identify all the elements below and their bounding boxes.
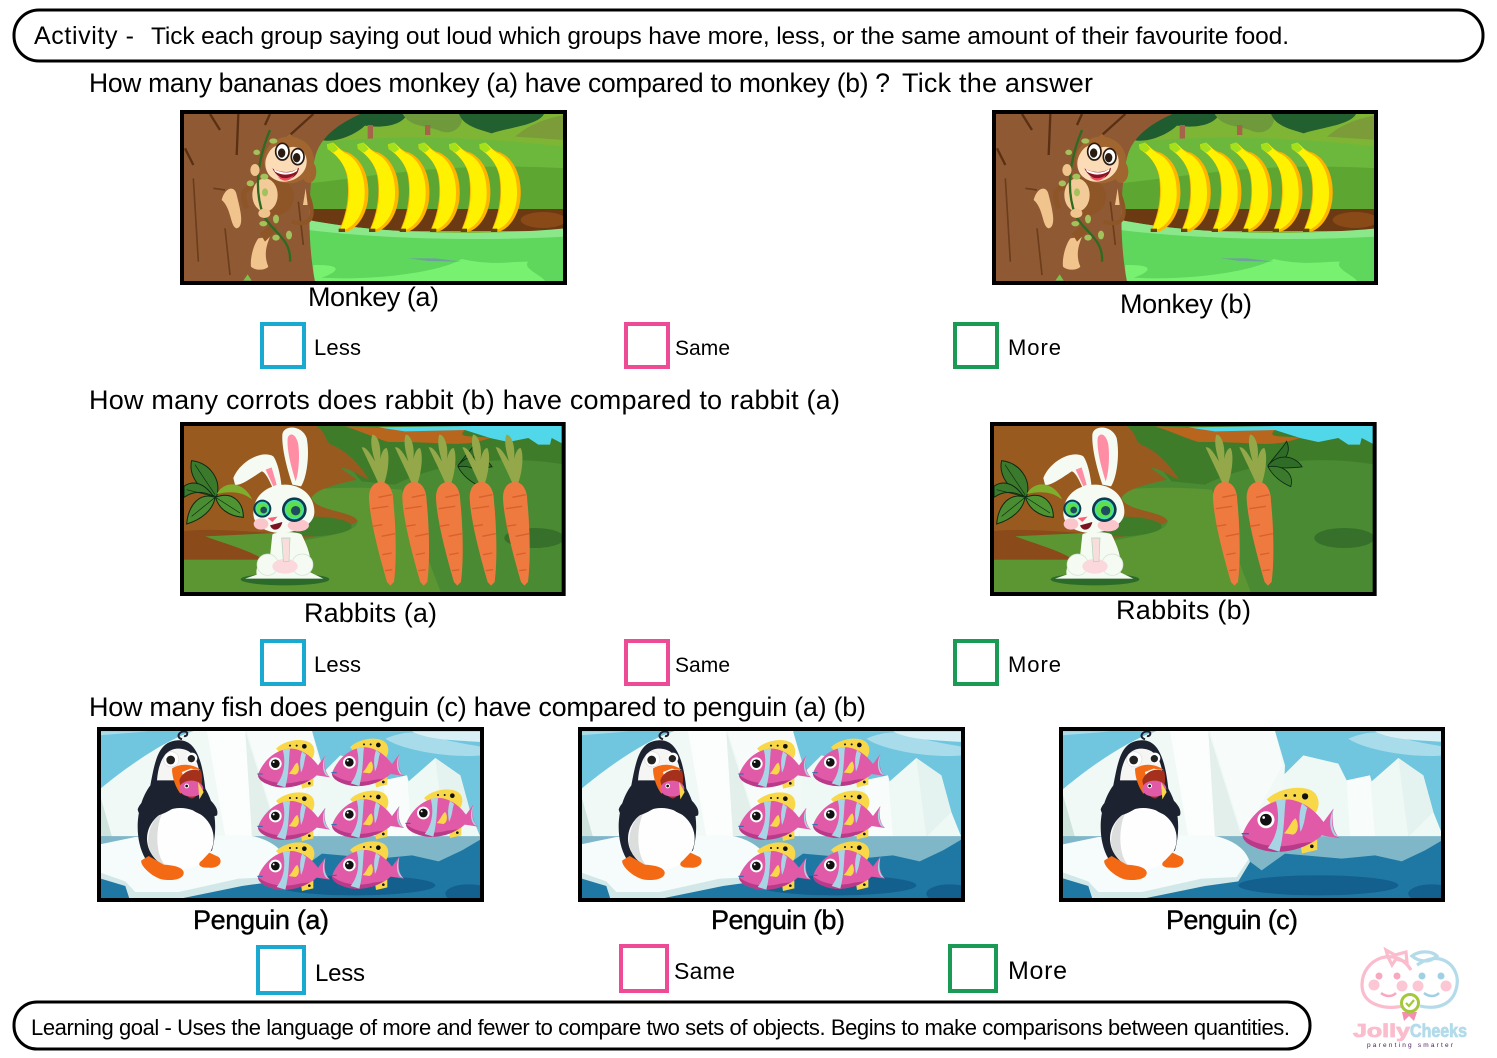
answer row 2 xyxy=(262,641,1061,684)
answer row 2: Same xyxy=(675,654,730,677)
question 2 heading: How many corrots does rabbit (b) have compared to rabbit (a) xyxy=(89,385,840,415)
learning goal banner: Learning goal - Uses the language of more and fewer to compare two sets of objects. Begins to make comparisons between quantities. xyxy=(31,1015,1290,1040)
question 1 heading: How many bananas does monkey (a) have compared to monkey (b) ? xyxy=(89,68,890,98)
answer row 1: Same xyxy=(675,337,730,360)
answer row 3: Less xyxy=(315,960,365,987)
activity instruction banner: Tick each group saying out loud which groups have more, less, or the same amount of their favourite food. xyxy=(151,23,1289,50)
answer row 3 xyxy=(258,946,1067,993)
picture: penguin (a) with seven fish xyxy=(97,727,492,903)
caption: Monkey (b): Monkey (b) xyxy=(1120,289,1252,319)
icon: blue baby face xyxy=(1412,952,1457,1007)
question 1 heading: Tick the answer xyxy=(902,68,1093,98)
picture: rabbit (b) with two carrots xyxy=(990,422,1378,597)
caption: Penguin (b): Penguin (b) xyxy=(711,905,845,935)
caption: Rabbits (a): Rabbits (a) xyxy=(304,598,437,628)
answer row 1: More xyxy=(1008,335,1061,360)
caption: Rabbits (b): Rabbits (b) xyxy=(1116,595,1251,625)
answer row 1: Less xyxy=(314,335,361,360)
picture: rabbit (a) with five carrots xyxy=(180,422,568,597)
answer row 2: More xyxy=(1008,652,1061,677)
question 3 heading: How many fish does penguin (c) have compared to penguin (a) (b) xyxy=(89,692,866,722)
learning goal banner xyxy=(14,1002,1310,1049)
answer row 3: More xyxy=(1008,957,1067,985)
caption: Penguin (a): Penguin (a) xyxy=(193,905,329,935)
picture: penguin (b) with six fish xyxy=(578,727,973,903)
answer row 1 xyxy=(262,324,1061,367)
icon: baby cheeks and eyes xyxy=(1368,972,1452,996)
activity instruction banner xyxy=(14,10,1483,61)
caption: Monkey (a): Monkey (a) xyxy=(308,282,439,312)
logo: JollyCheeks: parenting smarter xyxy=(1367,1042,1454,1049)
logo: JollyCheeks xyxy=(1353,950,1467,1049)
icon: green rosette tick xyxy=(1402,994,1418,1021)
picture: monkey (b) with six bananas xyxy=(992,110,1380,285)
logo: JollyCheeks: Jolly xyxy=(1353,1021,1410,1041)
activity instruction banner: Activity - xyxy=(34,22,134,50)
answer row 2: Less xyxy=(314,652,361,677)
icon: pink baby face xyxy=(1362,950,1411,1007)
logo: JollyCheeks: Cheeks xyxy=(1410,1021,1467,1041)
answer row 3: Same xyxy=(674,958,735,984)
picture: monkey (a) with six bananas xyxy=(180,110,568,285)
picture: penguin (c) with one fish xyxy=(1060,727,1455,903)
caption: Penguin (c): Penguin (c) xyxy=(1166,905,1298,935)
